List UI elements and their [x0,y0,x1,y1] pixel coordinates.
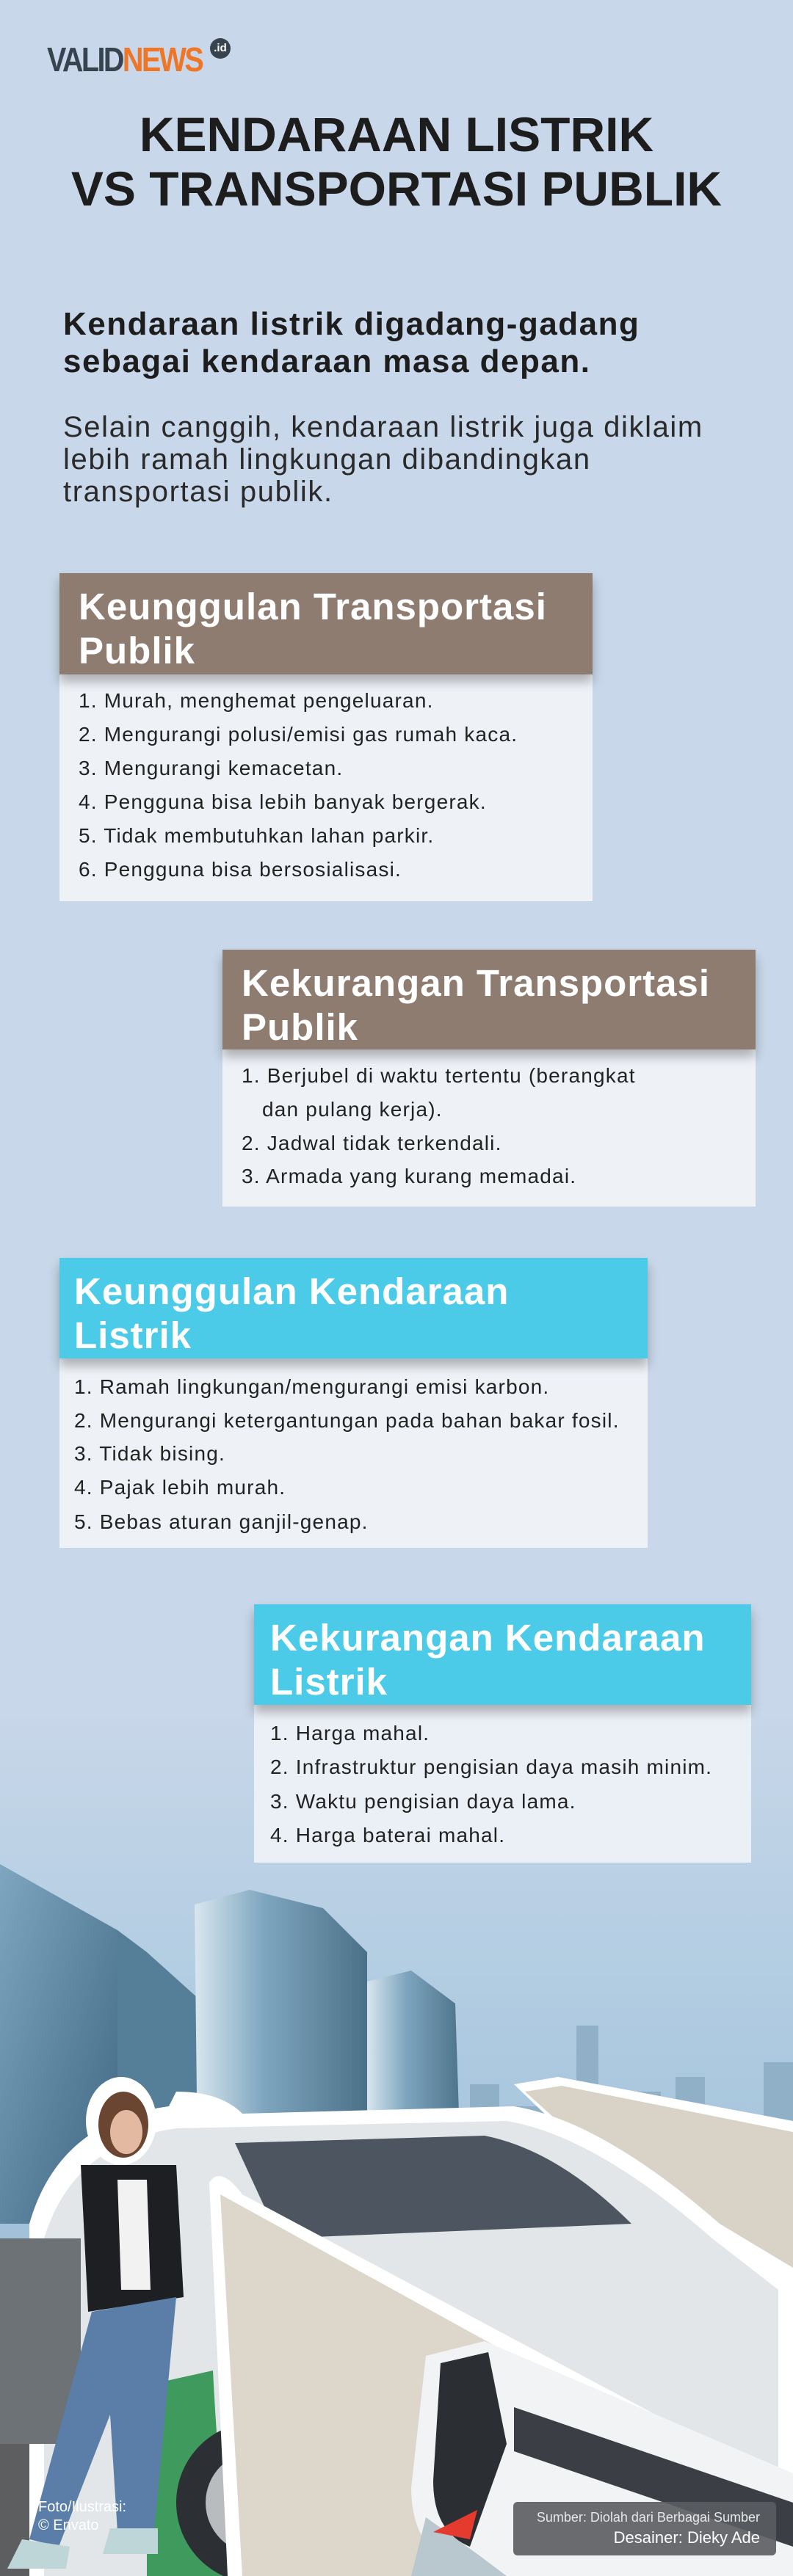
list: 4. Pajak lebih murah. [74,1476,286,1499]
list [222,1049,756,1207]
list: 1. Ramah lingkungan/mengurangi emisi karbon. [74,1375,549,1398]
heading: Kekurangan Kendaraan [270,1617,706,1659]
panel: keunggulan kendaraan listrik [53,1258,653,1548]
left dark car [0,2238,81,2444]
list: 1. Harga mahal. [270,1722,430,1744]
list [59,1358,648,1548]
source & designer credit box: Desainer: Dieky Ade [614,2528,760,2547]
heading: Listrik [270,1661,388,1703]
title: KENDARAAN LISTRIK [140,107,653,161]
heading: Keunggulan Kendaraan [74,1270,509,1312]
list: 4. Pengguna bisa lebih banyak bergerak. [79,790,487,813]
ground [0,2371,793,2576]
intro paragraph: lebih ramah lingkungan dibandingkan [63,443,591,476]
list: 5. Bebas aturan ganjil-genap. [74,1510,369,1533]
intro bold: sebagai kendaraan masa depan. [63,343,590,379]
list [59,674,593,901]
source & designer credit box: Sumber: Diolah dari Berbagai Sumber [537,2510,760,2525]
list: 5. Tidak membutuhkan lahan parkir. [79,824,434,847]
list: 2. Mengurangi ketergantungan pada bahan bakar fosil. [74,1409,620,1432]
intro paragraph: transportasi publik. [63,476,333,508]
heading [59,573,593,674]
list: 2. Jadwal tidak terkendali. [242,1132,502,1154]
logo: VALIDNEWS [47,40,202,79]
heading: Keunggulan Transportasi [79,586,547,627]
panel: kekurangan transportasi publik [216,950,762,1207]
distant skyline [470,2026,793,2172]
list: 3. Tidak bising. [74,1442,225,1465]
car [29,2092,793,2576]
list: 1. Berjubel di waktu tertentu (berangkat [242,1064,636,1087]
tram [209,2176,793,2576]
list: 3. Armada yang kurang memadai. [242,1165,576,1187]
list: 3. Mengurangi kemacetan. [79,757,343,779]
tram canopy [514,2077,793,2319]
list: 2. Infrastruktur pengisian daya masih minim. [270,1755,712,1778]
title [71,107,722,216]
photo credit: © Envato [38,2517,99,2533]
list [254,1705,751,1863]
panel: keunggulan transportasi publik [53,573,599,901]
list: 2. Mengurangi polusi/emisi gas rumah kaca. [79,723,518,746]
heading: Listrik [74,1314,192,1356]
panel: kekurangan kendaraan listrik [248,1604,758,1863]
heading: Publik [242,1006,358,1048]
intro paragraph [63,411,703,508]
heading [222,950,756,1049]
buildings [0,1864,463,2224]
list: 3. Waktu pengisian daya lama. [270,1790,576,1813]
heading [254,1604,751,1705]
list: dan pulang kerja). [262,1098,443,1121]
intro bold [63,306,640,379]
photo credit: Foto/Ilustrasi: [38,2499,126,2515]
intro bold: Kendaraan listrik digadang-gadang [63,306,640,342]
list: 1. Murah, menghemat pengeluaran. [79,689,434,712]
logo: .id [214,42,227,54]
woman [7,2077,184,2569]
heading [59,1258,648,1358]
photo collage background [0,1809,793,2576]
heading: Publik [79,630,195,672]
photo credit [38,2499,126,2533]
intro paragraph: Selain canggih, kendaraan listrik juga diklaim [63,411,703,443]
heading: Kekurangan Transportasi [242,962,710,1004]
list: 6. Pengguna bisa bersosialisasi. [79,858,402,881]
source & designer credit box [513,2502,776,2555]
list: 4. Harga baterai mahal. [270,1824,505,1847]
title: VS TRANSPORTASI PUBLIK [71,161,722,216]
